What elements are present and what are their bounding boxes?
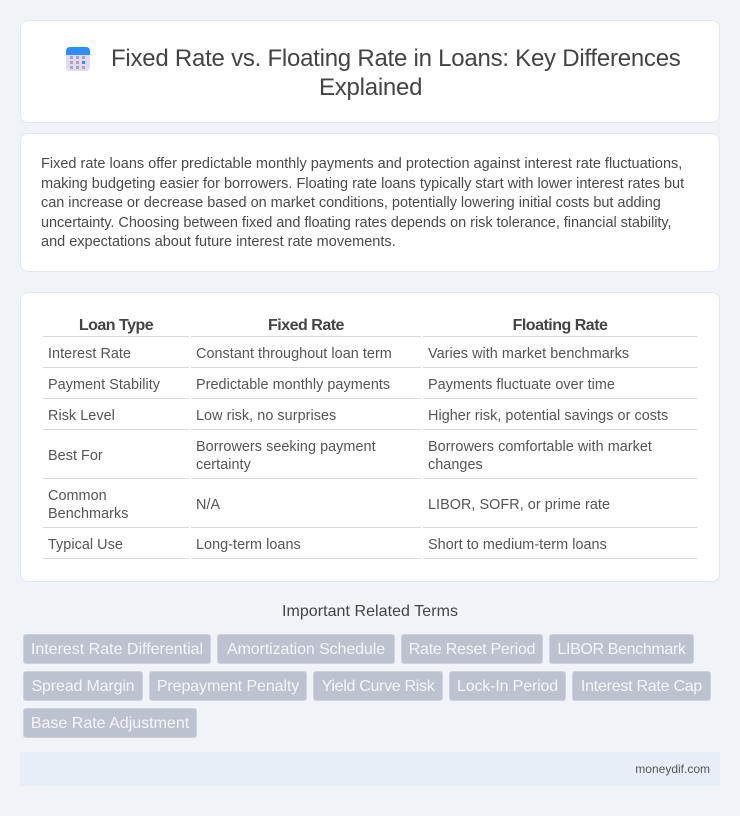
table rows: LIBOR, SOFR, or prime rate — [428, 497, 610, 513]
related terms heading: Important Related Terms — [282, 603, 458, 620]
tag list: Spread Margin — [32, 678, 134, 695]
table rows: Constant throughout loan term — [196, 346, 392, 362]
tag list: Amortization Schedule — [227, 641, 385, 658]
intro paragraph: can increase or decrease based on market conditions, potentially lowering initial costs but adding — [41, 195, 661, 211]
tag list: LIBOR Benchmark — [557, 641, 686, 658]
table rows: Common — [48, 488, 107, 504]
tag list: Prepayment Penalty — [157, 678, 299, 695]
table header: Floating Rate — [513, 317, 607, 334]
table rows: Short to medium-term loans — [428, 537, 607, 553]
intro paragraph: and expectations about future interest rate movements. — [41, 234, 396, 250]
table rows: Best For — [48, 448, 103, 464]
table rows: Risk Level — [48, 408, 115, 424]
intro paragraph: uncertainty. Choosing between fixed and floating rates depends on risk tolerance, financial stability, — [41, 214, 672, 230]
table rows: Interest Rate — [48, 346, 131, 362]
table rows: Benchmarks — [48, 506, 128, 522]
table rows: Typical Use — [48, 537, 123, 553]
tag list: Interest Rate Cap — [581, 678, 702, 695]
title: Explained — [319, 74, 422, 101]
table rows — [43, 336, 697, 559]
title: Fixed Rate vs. Floating Rate in Loans: Key Differences — [111, 45, 681, 72]
table rows: Payments fluctuate over time — [428, 377, 615, 393]
title — [111, 45, 681, 101]
panel: header — [20, 20, 720, 123]
panel: intro text — [20, 133, 720, 272]
icon: calendar — [66, 47, 90, 71]
tag list — [23, 634, 711, 738]
tag list: Yield Curve Risk — [322, 678, 434, 695]
table header: Fixed Rate — [268, 317, 344, 334]
table rows: Low risk, no surprises — [196, 408, 336, 424]
table rows: N/A — [196, 497, 220, 513]
tag list: Base Rate Adjustment — [31, 715, 189, 732]
tag list: Lock-In Period — [457, 678, 558, 695]
table rows: Varies with market benchmarks — [428, 346, 629, 362]
table rows: Long-term loans — [196, 537, 301, 553]
intro paragraph: Fixed rate loans offer predictable monthly payments and protection against interest rate fluctuations, — [41, 156, 682, 172]
table rows: changes — [428, 457, 483, 473]
table header — [79, 317, 608, 334]
table rows: Payment Stability — [48, 377, 160, 393]
intro paragraph — [41, 156, 684, 250]
table header: Loan Type — [79, 317, 153, 334]
table rows: Predictable monthly payments — [196, 377, 390, 393]
footer source: moneydif.com — [635, 762, 710, 776]
tag list: Interest Rate Differential — [31, 641, 203, 658]
table rows: certainty — [196, 457, 251, 473]
table rows: Borrowers comfortable with market — [428, 439, 652, 455]
intro paragraph: making budgeting easier for borrowers. Floating rate loans typically start with lower interest rates but — [41, 176, 684, 192]
tag list: Rate Reset Period — [409, 641, 535, 658]
table rows: Higher risk, potential savings or costs — [428, 408, 668, 424]
footer bar — [20, 752, 720, 786]
table rows: Borrowers seeking payment — [196, 439, 376, 455]
panel: comparison table — [20, 292, 720, 582]
